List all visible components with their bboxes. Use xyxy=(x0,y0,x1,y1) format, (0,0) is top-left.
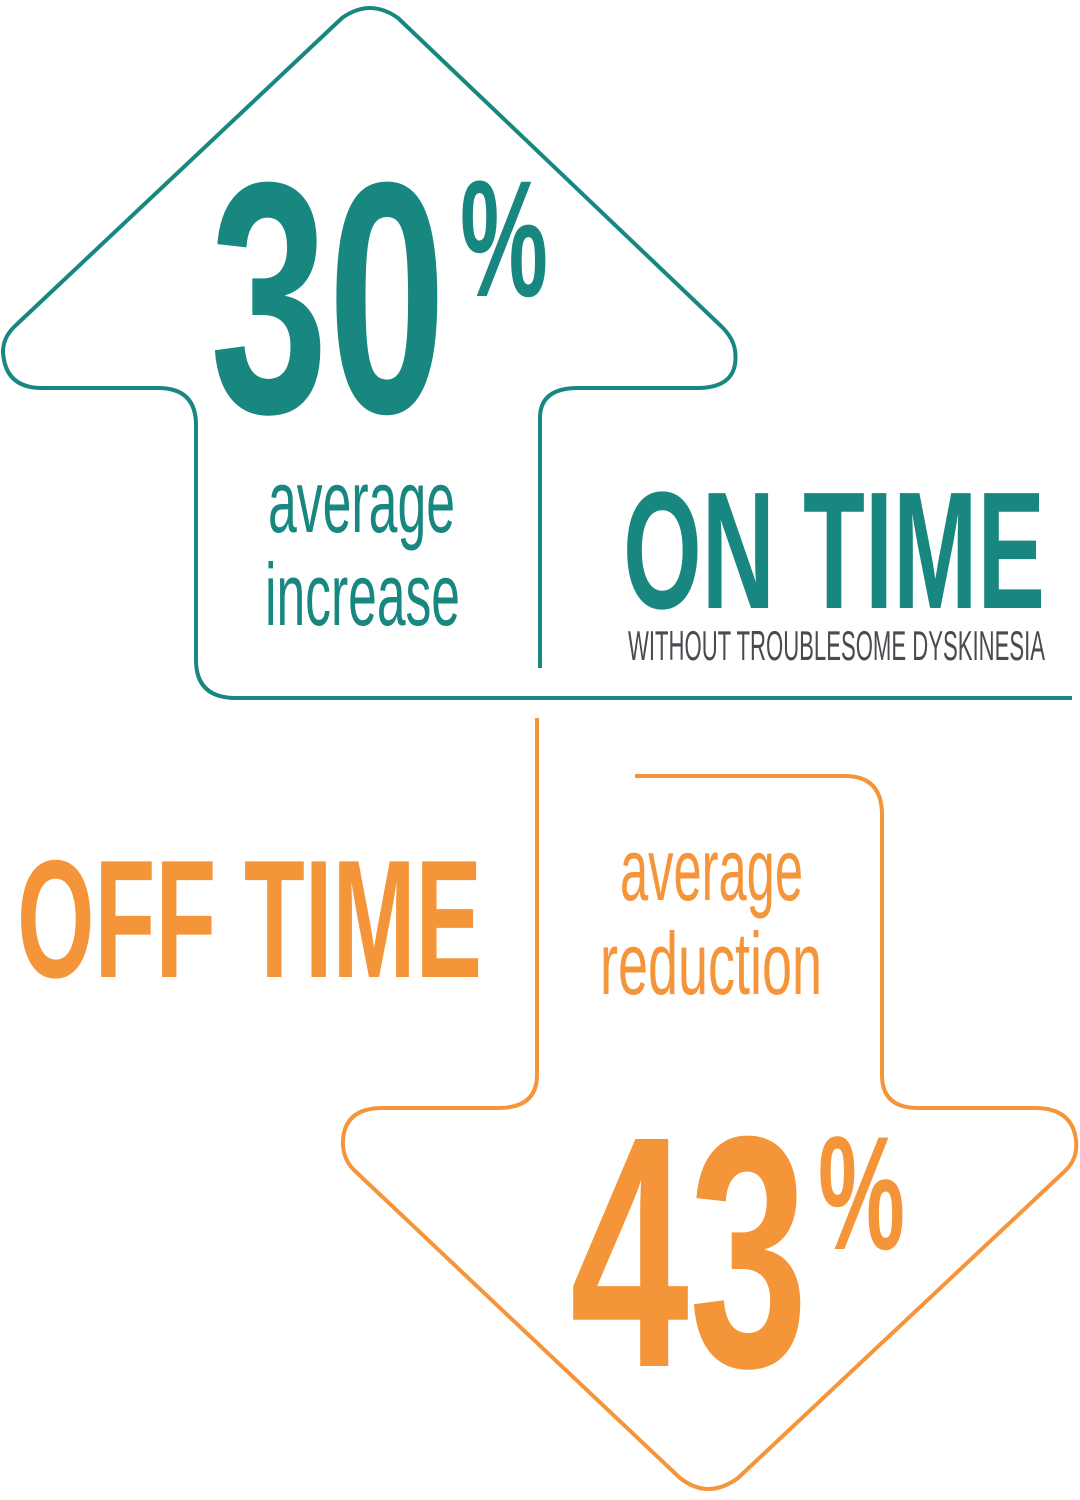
stat: 43%: % xyxy=(818,1103,905,1284)
down arrow outline: off time xyxy=(343,718,1076,1489)
stat: 43%: 43 xyxy=(570,1067,808,1436)
text: average increase xyxy=(265,452,460,644)
text: average reduction: average xyxy=(620,820,803,919)
up arrow outline: on time xyxy=(3,8,1072,698)
text: average increase: average xyxy=(268,452,455,551)
text: average reduction: reduction xyxy=(600,914,822,1013)
heading: OFF TIME: OFF TIME xyxy=(17,825,482,1013)
text: average reduction xyxy=(600,820,822,1013)
text: average increase: increase xyxy=(265,545,460,644)
stat: 30%: % xyxy=(460,147,548,332)
stat: 30%: 30 xyxy=(210,113,446,482)
